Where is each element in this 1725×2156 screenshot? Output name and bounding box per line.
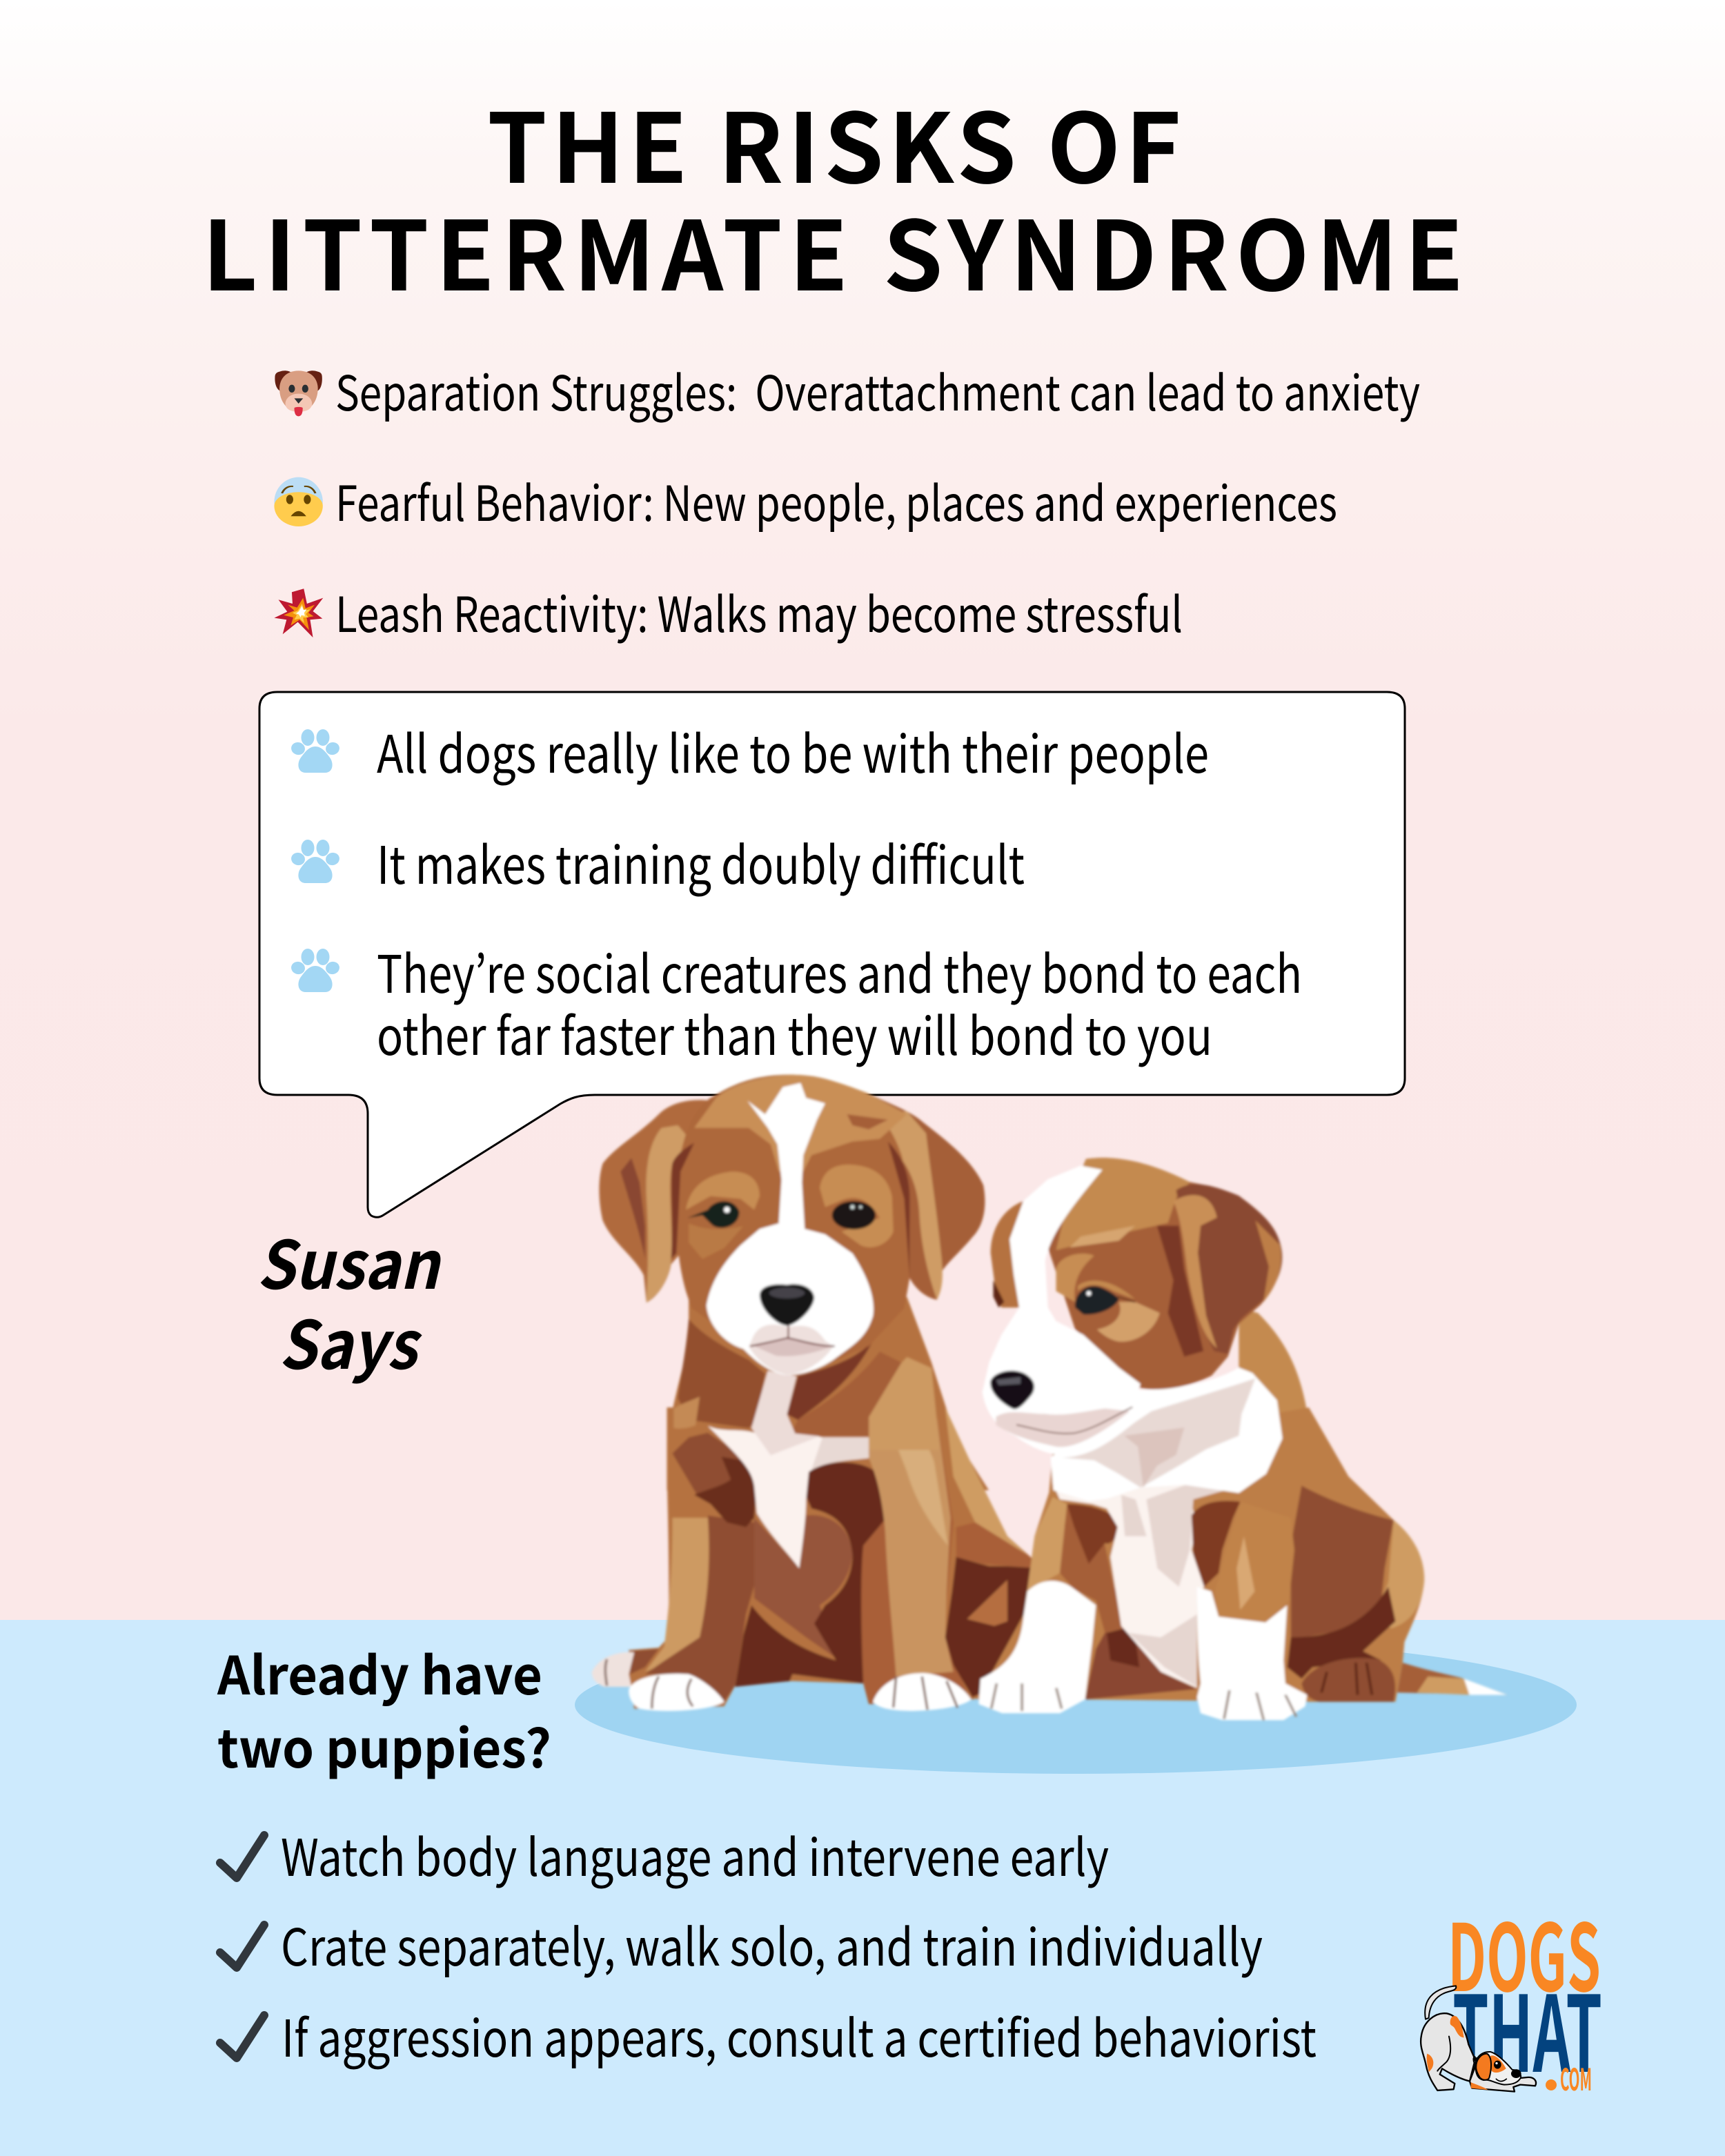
mouth bbox=[1016, 1407, 1132, 1434]
background: blue floor band bbox=[0, 1620, 1725, 2156]
right puppy lower body bbox=[977, 1407, 1507, 1720]
Susan Says label: Says bbox=[279, 1292, 422, 1388]
logo word DOGS: DOGS bbox=[1448, 1884, 1601, 2018]
right puppy chest and head bbox=[983, 1158, 1283, 1501]
icon: paw 3 bbox=[290, 949, 341, 992]
floor ellipse bbox=[575, 1636, 1577, 1774]
right ear bbox=[866, 1092, 985, 1300]
logo word COM with ball bbox=[1546, 2055, 1592, 2099]
logo: DogsThat.com: COM bbox=[1560, 2055, 1592, 2099]
icon: check 3 bbox=[220, 2015, 264, 2058]
nose bbox=[990, 1371, 1034, 1409]
icon: explosion bbox=[274, 589, 323, 637]
Leash Reactivity text: Leash Reactivity: Walks may become stressful bbox=[335, 577, 1183, 646]
left puppy shoulders bbox=[667, 1297, 989, 1490]
icon: fearful face bbox=[274, 477, 323, 526]
title: THE RISKS OF bbox=[487, 72, 1181, 211]
bubble text line 1: All dogs really like to be with their people bbox=[377, 713, 1209, 788]
blaze and muzzle white bbox=[707, 1083, 874, 1375]
head base bbox=[1048, 1158, 1281, 1389]
icon: check 1 bbox=[220, 1835, 264, 1878]
puppy: left bbox=[592, 1075, 1043, 1711]
icon: paw 1 bbox=[290, 729, 341, 773]
tip 2 text: Crate separately, walk solo, and train individually bbox=[281, 1907, 1263, 1981]
bubble text line 2: It makes training doubly difficult bbox=[377, 824, 1025, 899]
logo: DogsThat.com bbox=[1421, 1884, 1602, 2102]
Separation Struggles text: Separation Struggles: Overattachment can lead to anxiety bbox=[335, 355, 1420, 425]
logo dog mascot bbox=[1421, 1986, 1536, 2092]
forehead tan bbox=[1056, 1158, 1190, 1250]
eyes bbox=[687, 1201, 739, 1228]
tips list bbox=[220, 1817, 1317, 2072]
blaze and muzzle white bbox=[983, 1166, 1152, 1455]
chin bbox=[749, 1325, 834, 1375]
ear bbox=[1157, 1226, 1203, 1356]
heading: Already have two puppies: Already have bbox=[217, 1634, 542, 1710]
icon: paw 2 bbox=[290, 840, 341, 883]
left ear bbox=[599, 1100, 711, 1303]
right puppy shoulder bbox=[1239, 1307, 1310, 1422]
forehead tan bbox=[694, 1075, 907, 1171]
icon: check 2 bbox=[220, 1925, 264, 1968]
logo word THAT: THAT bbox=[1452, 1950, 1602, 2102]
bubble text line 4: other far faster than they will bond to you bbox=[377, 995, 1212, 1070]
background: pink gradient bbox=[0, 0, 1725, 1621]
panel: speech bubble bbox=[259, 692, 1405, 1217]
heading: Already have two puppies: two puppies? bbox=[217, 1707, 551, 1783]
title: LITTERMATE SYNDROME bbox=[202, 180, 1463, 319]
head base bbox=[676, 1075, 911, 1376]
nose bbox=[760, 1284, 814, 1326]
title bbox=[202, 72, 1463, 319]
left puppy neck and head bbox=[599, 1075, 985, 1455]
risks list bbox=[274, 355, 1420, 646]
bubble shape bbox=[259, 692, 1405, 1217]
right eye patch bbox=[820, 1165, 894, 1247]
bubble text line 3: They’re social creatures and they bond to each bbox=[377, 933, 1302, 1008]
muzzle pink bbox=[996, 1408, 1130, 1447]
puppy: right bbox=[977, 1158, 1507, 1720]
left puppy lower body bbox=[592, 1407, 1043, 1711]
illustration: two puppies bbox=[592, 1075, 1508, 1720]
left sliver bbox=[991, 1201, 1023, 1307]
Susan Says label: Susan bbox=[257, 1212, 442, 1308]
mouth bbox=[750, 1325, 835, 1346]
Susan Says label bbox=[257, 1212, 442, 1388]
eye bbox=[1075, 1286, 1118, 1314]
heading: Already have two puppies bbox=[217, 1634, 551, 1783]
tip 1 text: Watch body language and intervene early bbox=[281, 1817, 1109, 1891]
left eye patch bbox=[686, 1171, 760, 1210]
Fearful Behavior text: Fearful Behavior: New people, places and experiences bbox=[335, 466, 1337, 535]
tip 3 text: If aggression appears, consult a certified behaviorist bbox=[282, 1998, 1317, 2072]
icon: dog face bbox=[275, 370, 322, 416]
